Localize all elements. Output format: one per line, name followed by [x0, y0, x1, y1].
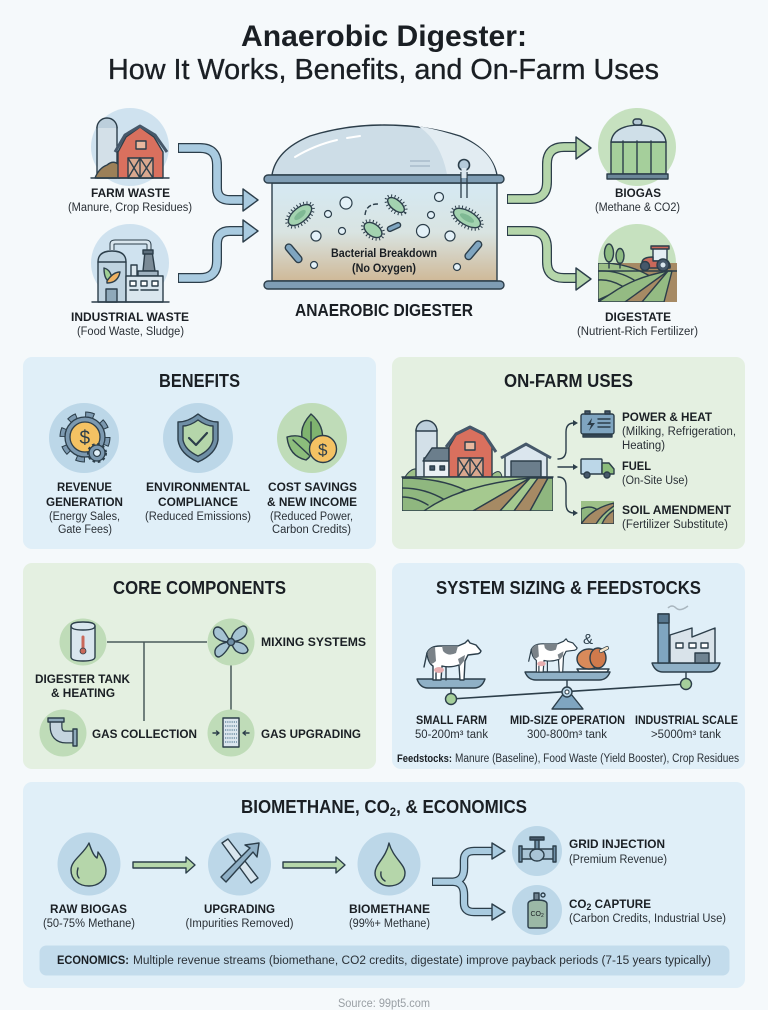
arrow: farm waste to digester [178, 148, 258, 211]
tier: small farm [415, 713, 488, 741]
label: bacterial breakdown [331, 246, 437, 275]
panel: benefits [23, 357, 376, 549]
step: biomethane [349, 902, 430, 930]
icon: raw biogas flame [58, 832, 120, 896]
benefit: revenue generation [46, 480, 123, 536]
icon: compliance shield [163, 403, 233, 473]
benefit: environmental compliance: (Reduced Emissions) [145, 511, 251, 523]
illustration: farm [402, 420, 553, 511]
icon: revenue gear [49, 403, 119, 473]
bubbles [310, 192, 460, 270]
label: farm waste: FARM WASTE [91, 186, 170, 200]
arrow: digester to digestate [507, 231, 591, 290]
use: fuel [622, 459, 688, 487]
economics callout [40, 946, 730, 976]
tier: mid-size operation: 300-800m³ tank [527, 729, 607, 741]
icon: CO2 cylinder: CO [530, 911, 541, 918]
heading: system sizing: SYSTEM SIZING & FEEDSTOCKS [436, 578, 701, 598]
icon: gas upgrading filter [208, 710, 254, 756]
benefit: environmental compliance [145, 480, 251, 523]
benefit: revenue generation: REVENUE [57, 480, 112, 494]
icon: CO2 cylinder: 2 [541, 913, 544, 919]
use: power and heat: Heating) [622, 440, 665, 452]
heading: benefits: BENEFITS [159, 371, 240, 391]
label: industrial waste: INDUSTRIAL WASTE [71, 310, 189, 324]
panel: on-farm uses [392, 357, 745, 549]
icon: truck [581, 459, 614, 478]
icon: soil [581, 501, 614, 524]
step: biomethane: (99%+ Methane) [349, 918, 430, 930]
icon: cow mid-size [529, 639, 577, 672]
benefit: cost savings [267, 480, 357, 536]
anaerobic digester tank [264, 125, 504, 320]
component: gas collection: GAS COLLECTION [92, 727, 197, 741]
use: soil amendment: SOIL AMENDMENT [622, 503, 732, 517]
benefit: cost savings: COST SAVINGS [268, 480, 357, 494]
benefit: cost savings: & NEW INCOME [267, 495, 357, 509]
title: Anaerobic Digester: [241, 20, 527, 53]
step: raw biogas [43, 902, 135, 930]
arrow: biogas to upgrading [133, 857, 195, 873]
arrow: upgrading to biomethane [283, 857, 345, 873]
panel: system sizing and feedstocks [392, 563, 745, 769]
label: farm waste: (Manure, Crop Residues) [68, 202, 192, 214]
label: farm waste [68, 186, 192, 214]
use: soil amendment [622, 503, 732, 531]
heading: core components: CORE COMPONENTS [113, 578, 286, 598]
step: upgrading: (Impurities Removed) [186, 918, 294, 930]
panel: core components [23, 563, 376, 769]
tier: small farm: SMALL FARM [416, 713, 487, 727]
label: industrial waste: (Food Waste, Sludge) [77, 326, 184, 338]
arrow: industrial waste to digester [178, 220, 258, 278]
tier: industrial scale [635, 713, 738, 741]
component: digester tank and heating: & HEATING [51, 686, 115, 700]
step: raw biogas: RAW BIOGAS [50, 902, 127, 916]
tier: small farm: 50-200m³ tank [415, 729, 488, 741]
output: CO2 capture: CAPTURE [591, 897, 651, 911]
bacteria [282, 192, 486, 264]
icon: cow small farm [424, 640, 481, 680]
component: gas upgrading: GAS UPGRADING [261, 727, 361, 741]
benefit: environmental compliance: ENVIRONMENTAL [146, 480, 250, 494]
use: power and heat: (Milking, Refrigeration, [622, 426, 736, 438]
icon: leaves and coin [277, 403, 347, 473]
arrow: digester to biogas [507, 137, 591, 199]
benefit: cost savings: Carbon Credits) [272, 524, 351, 536]
benefit: cost savings: (Reduced Power, [270, 511, 353, 523]
icon: gas collection pipe [40, 710, 86, 756]
icon: upgrading tools [208, 832, 271, 896]
output: CO2 capture: CO [569, 897, 587, 911]
title [108, 20, 659, 86]
output: CO2 capture [569, 897, 726, 925]
use: power and heat: POWER & HEAT [622, 410, 713, 424]
step: biomethane: BIOMETHANE [349, 902, 430, 916]
use: power and heat [622, 410, 736, 452]
label: digestate [577, 310, 698, 338]
heading: biomethane: BIOMETHANE, CO [241, 797, 399, 817]
benefit: revenue generation: (Energy Sales, [49, 511, 120, 523]
label: bacterial breakdown: Bacterial Breakdown [331, 246, 437, 260]
label: industrial waste [71, 310, 189, 338]
economics callout: ECONOMICS: [57, 953, 129, 967]
icon: CO2 cylinder [512, 885, 562, 935]
icon: digester tank [60, 618, 106, 666]
icon: grid valve [512, 826, 562, 876]
component: digester tank and heating: DIGESTER TANK [35, 672, 130, 686]
connector lines [107, 642, 231, 721]
heading: biomethane: , & ECONOMICS [396, 797, 527, 817]
output: CO2 capture: (Carbon Credits, Industrial Use) [569, 913, 726, 925]
icon: food waste [577, 648, 609, 672]
tier: mid-size operation: MID-SIZE OPERATION [510, 713, 625, 727]
icon: mixer fan [208, 618, 254, 666]
label: bacterial breakdown: (No Oxygen) [352, 261, 416, 275]
tier: mid-size operation [510, 713, 625, 741]
output: CO2 capture: 2 [586, 902, 591, 912]
use: fuel: FUEL [622, 459, 651, 473]
benefit: revenue generation: GENERATION [46, 495, 123, 509]
panel: biomethane, CO2 and economics [23, 782, 745, 988]
label: biogas [595, 186, 680, 214]
label: digestate: (Nutrient-Rich Fertilizer) [577, 326, 698, 338]
tier: industrial scale: INDUSTRIAL SCALE [635, 713, 738, 727]
component: mixing systems: MIXING SYSTEMS [261, 635, 366, 649]
label: digestate: DIGESTATE [605, 310, 671, 324]
output: grid injection [569, 837, 667, 866]
arrow: branching to grid and CO2 [432, 843, 505, 920]
output: digestate [577, 224, 698, 338]
economics callout: Multiple revenue streams (biomethane, CO2 credits, digestate) improve payback periods (7-15 years typically) [133, 955, 711, 967]
icon: leaves and coin: $ [318, 440, 328, 460]
benefit: environmental compliance: COMPLIANCE [158, 495, 238, 509]
label: anaerobic digester: ANAEROBIC DIGESTER [295, 300, 473, 320]
step: upgrading: UPGRADING [204, 902, 275, 916]
balance scale [417, 663, 720, 709]
symbol: ampersand: & [583, 631, 593, 648]
icon: biomethane drop [358, 832, 420, 896]
heading: on-farm uses: ON-FARM USES [504, 371, 633, 391]
component: digester tank and heating [35, 672, 130, 700]
step: upgrading [186, 902, 294, 930]
label: biogas: BIOGAS [615, 186, 661, 200]
process flow: farm waste input [68, 108, 192, 214]
use: fuel: (On-Site Use) [622, 475, 688, 487]
benefit: revenue generation: Gate Fees) [58, 524, 112, 536]
icon: revenue gear: $ [80, 428, 90, 449]
process flow: industrial waste input [71, 224, 189, 338]
arrows: uses [558, 420, 578, 516]
heading: biomethane: 2 [390, 805, 396, 819]
source note: Source: 99pt5.com [338, 998, 430, 1010]
icon: generator [581, 411, 614, 437]
output: biogas [595, 108, 680, 214]
use: soil amendment: (Fertilizer Substitute) [622, 519, 728, 531]
output: grid injection: (Premium Revenue) [569, 854, 667, 866]
output: grid injection: GRID INJECTION [569, 837, 665, 851]
feedstocks note: Feedstocks: [397, 753, 452, 765]
icon: factory [658, 606, 715, 663]
step: raw biogas: (50-75% Methane) [43, 918, 135, 930]
label: biogas: (Methane & CO2) [595, 202, 680, 214]
title: How It Works, Benefits, and On-Farm Uses [108, 54, 659, 86]
tier: industrial scale: >5000m³ tank [651, 729, 721, 741]
